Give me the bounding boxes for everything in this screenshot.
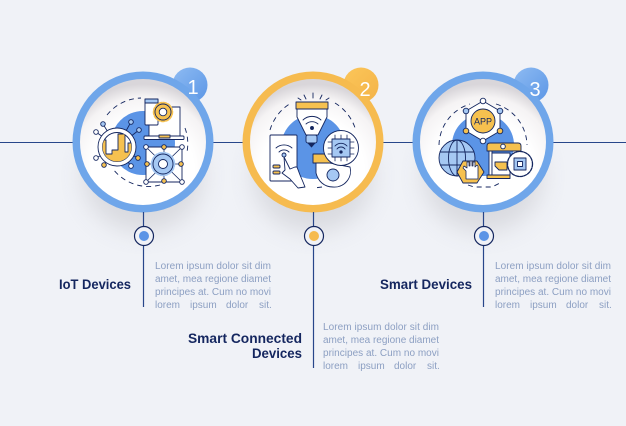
chip [324, 130, 358, 166]
chip brain [508, 152, 532, 176]
timeline line [0, 142, 626, 144]
badge number 1: 1 [187, 77, 199, 99]
connector 3 [474, 212, 494, 307]
gear network [144, 145, 184, 184]
globe [439, 140, 484, 183]
text block 1: principes at. Cum no movi [155, 287, 271, 298]
panel: Smart Devices circle [412, 68, 554, 232]
text block 2: lorem [323, 361, 348, 372]
text block 3: ipsum [530, 300, 557, 311]
hub [313, 154, 351, 187]
text block 1: Lorem ipsum dolor sit dim [155, 261, 271, 272]
text block 3: Lorem ipsum dolor sit dim [495, 261, 611, 272]
text block 1 [155, 261, 272, 311]
3d printer [487, 143, 521, 178]
badge number 3: 3 [529, 79, 541, 101]
connector 2 [304, 212, 324, 368]
text block 1: dolor [226, 300, 249, 311]
panel: IoT Devices circle [72, 68, 214, 232]
text block 2: sit. [427, 361, 440, 372]
text block 1: ipsum [190, 300, 217, 311]
heading: IoT Devices: IoT Devices [59, 276, 131, 292]
text block 2: ipsum [358, 361, 385, 372]
text block 2: principes at. Cum no movi [323, 348, 439, 359]
text block 1: lorem [155, 300, 180, 311]
text block 3: amet, mea regione diamet [495, 274, 611, 285]
heading: Smart Connected Devices: Devices [252, 345, 302, 361]
icon: IoT devices [94, 98, 188, 186]
text block 1: amet, mea regione diamet [155, 274, 271, 285]
phone and hand [270, 135, 305, 188]
text block 2: Lorem ipsum dolor sit dim [323, 322, 439, 333]
smart bulb [296, 93, 329, 147]
heading: Smart Connected Devices: Smart Connected [188, 330, 302, 346]
text block 2: amet, mea regione diamet [323, 335, 439, 346]
icon: smart connected devices [270, 93, 358, 188]
text block 2: dolor [394, 361, 417, 372]
heading: Smart Connected Devices [188, 330, 302, 361]
app network [463, 98, 503, 144]
text block 3: dolor [566, 300, 589, 311]
heading: Smart Devices: Smart Devices [380, 276, 472, 292]
text block 3: sit. [599, 300, 612, 311]
panel: Smart Connected Devices circle [242, 68, 384, 232]
laptop [144, 99, 184, 140]
chart globe [94, 120, 141, 168]
text block 3: principes at. Cum no movi [495, 287, 611, 298]
connector 1 [134, 212, 154, 307]
icon: smart devices [439, 98, 532, 187]
badge number 2: 2 [359, 79, 371, 101]
text block 3 [495, 261, 612, 311]
APP label: APP [474, 116, 492, 126]
text block 1: sit. [259, 300, 272, 311]
text block 3: lorem [495, 300, 520, 311]
text block 2 [323, 322, 440, 372]
